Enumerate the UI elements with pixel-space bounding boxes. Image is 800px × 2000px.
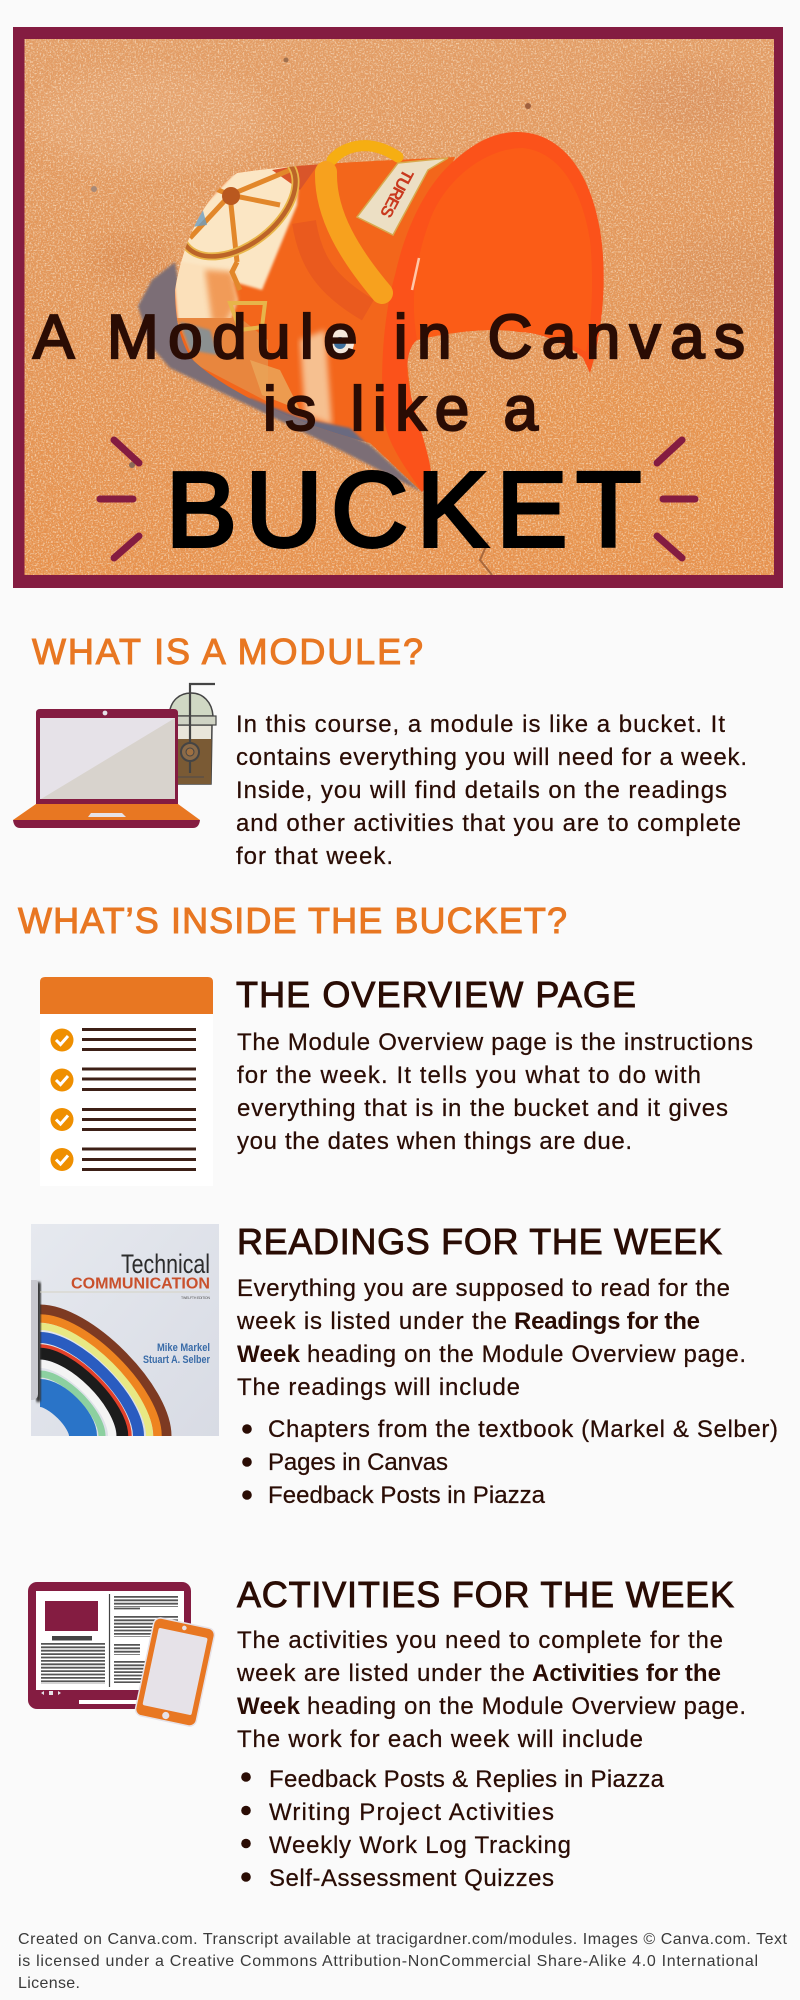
phone — [134, 1617, 216, 1727]
book authors: Mike Markel — [157, 1342, 210, 1354]
body text: Week — [237, 1693, 301, 1720]
bullet list: Pages in Canvas — [268, 1449, 448, 1476]
body text: for the week. It tells you what to do with — [237, 1062, 701, 1089]
bucket handle — [326, 146, 398, 293]
title line 3: BUCKET: BUCKET — [166, 451, 641, 569]
section: readings for the week — [236, 1221, 778, 1509]
side panel — [31, 1280, 41, 1402]
body text: Readings for the — [514, 1308, 700, 1335]
text block: module intro: contains everything you will need for a week. — [236, 744, 747, 771]
maroon frame — [13, 27, 783, 588]
body text — [236, 1627, 746, 1753]
footer credits: License. — [18, 1975, 80, 1992]
bullet list — [241, 1766, 665, 1892]
ship wheel print — [190, 170, 290, 262]
body text: you the dates when things are due. — [237, 1128, 632, 1155]
bullet list — [242, 1416, 778, 1509]
body text: week is listed under the — [236, 1308, 507, 1335]
laptop — [13, 709, 200, 828]
footer credits: Created on Canva.com. Transcript available at tracigardner.com/modules. Images © Canva.com. Text — [18, 1931, 788, 1948]
list lines — [82, 1030, 196, 1170]
body text: The readings will include — [237, 1374, 520, 1401]
body text: heading on the Module Overview page. — [307, 1693, 746, 1720]
body text: Week — [237, 1341, 301, 1368]
subheading: READINGS FOR THE WEEK — [237, 1221, 722, 1262]
iced coffee cup — [169, 684, 216, 784]
bullet list: Chapters from the textbook (Markel & Selber) — [268, 1416, 778, 1443]
text block: module intro: and other activities that you are to complete — [236, 810, 741, 837]
body text: The activities you need to complete for the — [237, 1627, 723, 1654]
cream label on bucket — [357, 158, 448, 235]
bullet list: Writing Project Activities — [269, 1799, 554, 1826]
title line 2: is like a — [263, 375, 539, 444]
cream label on bucket: TURES — [376, 166, 417, 221]
small round logo — [332, 330, 354, 354]
bucket rim band under handle — [304, 222, 368, 310]
body text: week are listed under the — [236, 1660, 525, 1687]
hero panel: framed beach bucket photo with title — [13, 27, 783, 588]
body text: everything that is in the bucket and it gives — [237, 1095, 728, 1122]
text block: module intro: In this course, a module is like a bucket. It — [236, 711, 725, 738]
tablet — [28, 1582, 191, 1709]
image: textbook cover: Stuart A. Selber — [143, 1354, 211, 1366]
icon: checklist — [40, 977, 213, 1186]
bullet list: Weekly Work Log Tracking — [269, 1832, 571, 1859]
section: activities for the week — [236, 1574, 746, 1892]
body text — [236, 1275, 746, 1401]
check marks — [50, 1028, 74, 1171]
bucket body — [175, 157, 455, 492]
text block: module intro — [236, 711, 747, 870]
book title: Technical — [121, 1249, 210, 1279]
bullet list: Feedback Posts & Replies in Piazza — [269, 1766, 665, 1793]
rainbow cable arcs — [40, 1310, 166, 1436]
image: textbook cover: TWELFTH EDITION — [181, 1296, 210, 1300]
footer credits — [18, 1931, 788, 1992]
decorative rays beside BUCKET — [100, 440, 695, 558]
bullet list: Feedback Posts in Piazza — [268, 1482, 546, 1509]
body text: heading on the Module Overview page. — [307, 1341, 746, 1368]
text block: module intro: for that week. — [236, 843, 393, 870]
text block: module intro: Inside, you will find details on the readings — [236, 777, 727, 804]
body text: Activities for the — [532, 1660, 721, 1687]
heading: what's inside the bucket: WHAT’S INSIDE THE BUCKET? — [18, 900, 567, 941]
icon: tablet and phone — [28, 1582, 216, 1727]
body text: Everything you are supposed to read for the — [237, 1275, 730, 1302]
photo: bucket in the sand — [24, 39, 780, 575]
bucket shadow — [138, 262, 422, 492]
body text: The Module Overview page is the instructions — [237, 1029, 753, 1056]
section: the overview page — [236, 974, 753, 1155]
bucket opening — [382, 132, 604, 492]
title line 1: A Module in Canvas — [33, 303, 745, 372]
body text — [237, 1029, 753, 1155]
footer credits: is licensed under a Creative Commons Attribution-NonCommercial Share-Alike 4.0 International — [18, 1953, 758, 1970]
heading: what is a module: WHAT IS A MODULE? — [32, 631, 423, 672]
icon: laptop and iced coffee — [13, 684, 216, 828]
sand — [24, 39, 774, 575]
image: textbook cover: COMMUNICATION — [71, 1276, 210, 1292]
bullet list: Self-Assessment Quizzes — [269, 1865, 554, 1892]
subheading: ACTIVITIES FOR THE WEEK — [237, 1574, 734, 1615]
subheading: THE OVERVIEW PAGE — [236, 974, 636, 1015]
body text: The work for each week will include — [237, 1726, 643, 1753]
image: textbook cover — [31, 1224, 219, 1436]
